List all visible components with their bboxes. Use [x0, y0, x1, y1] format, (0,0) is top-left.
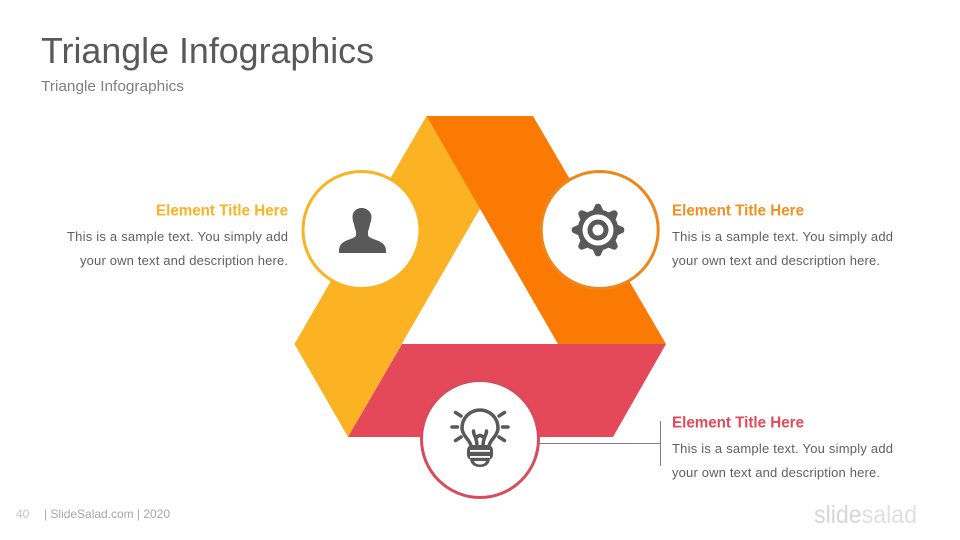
text block: right element: Element Title Here — [672, 202, 804, 220]
text block: left element: This is a sample text. You simply add — [67, 229, 288, 244]
text block: left element: your own text and description here. — [80, 253, 288, 268]
subtitle: Triangle Infographics — [41, 78, 184, 95]
triangle diagram — [294, 116, 666, 437]
text block: bottom element: Element Title Here — [672, 414, 804, 432]
icon: gear — [574, 206, 622, 254]
segment: orange band — [426, 116, 666, 344]
logo text: slidesalad — [814, 501, 917, 529]
text block: bottom element: This is a sample text. You simply add — [672, 441, 893, 456]
icon: light bulb — [452, 410, 508, 467]
text block: bottom element — [672, 414, 893, 480]
text block: right element: This is a sample text. You simply add — [672, 229, 893, 244]
text block: right element — [672, 202, 893, 268]
text block: right element: your own text and description here. — [672, 253, 880, 268]
text block: bottom element: your own text and description here. — [672, 465, 880, 480]
icon: person — [339, 208, 386, 253]
connector line — [539, 421, 660, 466]
segment: red band — [348, 344, 666, 437]
text block: left element — [67, 202, 288, 268]
circle: gear — [541, 172, 658, 288]
text block: left element: Element Title Here — [156, 202, 288, 220]
segment: yellow band — [294, 116, 480, 437]
title: Triangle Infographics — [41, 30, 374, 71]
circle: light bulb — [422, 380, 538, 498]
circle: person — [303, 172, 420, 288]
footer text: | SlideSalad.com | 2020 — [44, 507, 170, 521]
page number: 40 — [16, 507, 30, 521]
